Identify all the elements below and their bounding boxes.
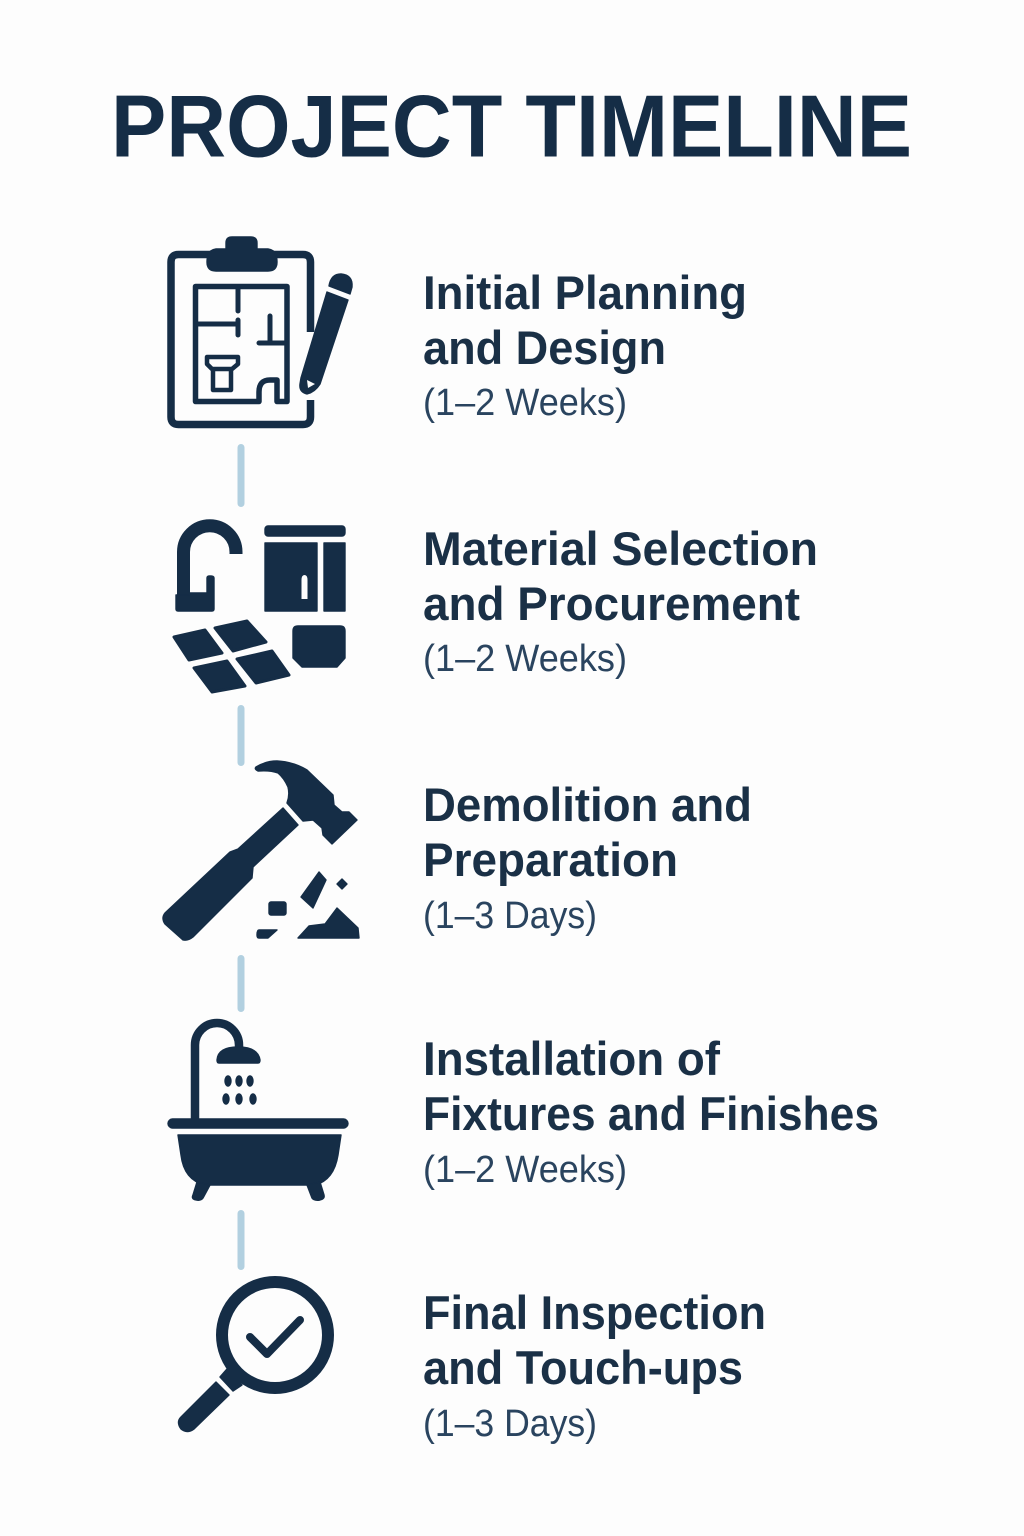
text: demolition: Demolition and <box>423 778 752 831</box>
icon: bathtub with shower <box>168 1023 348 1200</box>
text: demolition: Preparation <box>423 833 678 886</box>
text: installation: (1–2 Weeks) <box>423 1149 627 1191</box>
text: material selection: Material Selection <box>423 522 818 575</box>
text: initial planning: Initial Planning <box>423 266 747 319</box>
icon: faucet, vanity and tiles <box>174 526 345 692</box>
title: PROJECT TIMELINE <box>111 76 912 176</box>
text: final inspection: Final Inspection <box>423 1286 766 1339</box>
connector 4 <box>238 1210 244 1270</box>
text: demolition: (1–3 Days) <box>423 895 597 937</box>
connector 2 <box>238 705 244 766</box>
text: material selection <box>423 522 818 680</box>
text: demolition <box>423 778 752 937</box>
step 4: installation <box>168 1023 879 1200</box>
icon: hammer and debris <box>163 761 359 940</box>
text: installation: Installation of <box>423 1032 720 1085</box>
step 1: initial planning <box>171 237 747 424</box>
step 5: final inspection <box>178 1282 766 1445</box>
text: final inspection: and Touch-ups <box>423 1341 743 1394</box>
text: final inspection: (1–3 Days) <box>423 1403 597 1445</box>
text: material selection: and Procurement <box>423 577 800 630</box>
icon: magnifying glass with check <box>178 1282 328 1432</box>
text: initial planning: and Design <box>423 321 666 374</box>
icon: clipboard with floor plan and pencil <box>171 237 352 424</box>
step 3: demolition <box>163 761 752 940</box>
step 2: material selection <box>174 522 818 692</box>
text: initial planning: (1–2 Weeks) <box>423 382 627 424</box>
text: material selection: (1–2 Weeks) <box>423 638 627 680</box>
connector 3 <box>238 955 244 1012</box>
text: installation <box>423 1032 879 1191</box>
text: installation: Fixtures and Finishes <box>423 1087 879 1140</box>
text: initial planning <box>423 266 747 424</box>
text: final inspection <box>423 1286 766 1445</box>
connector 1 <box>238 444 244 507</box>
